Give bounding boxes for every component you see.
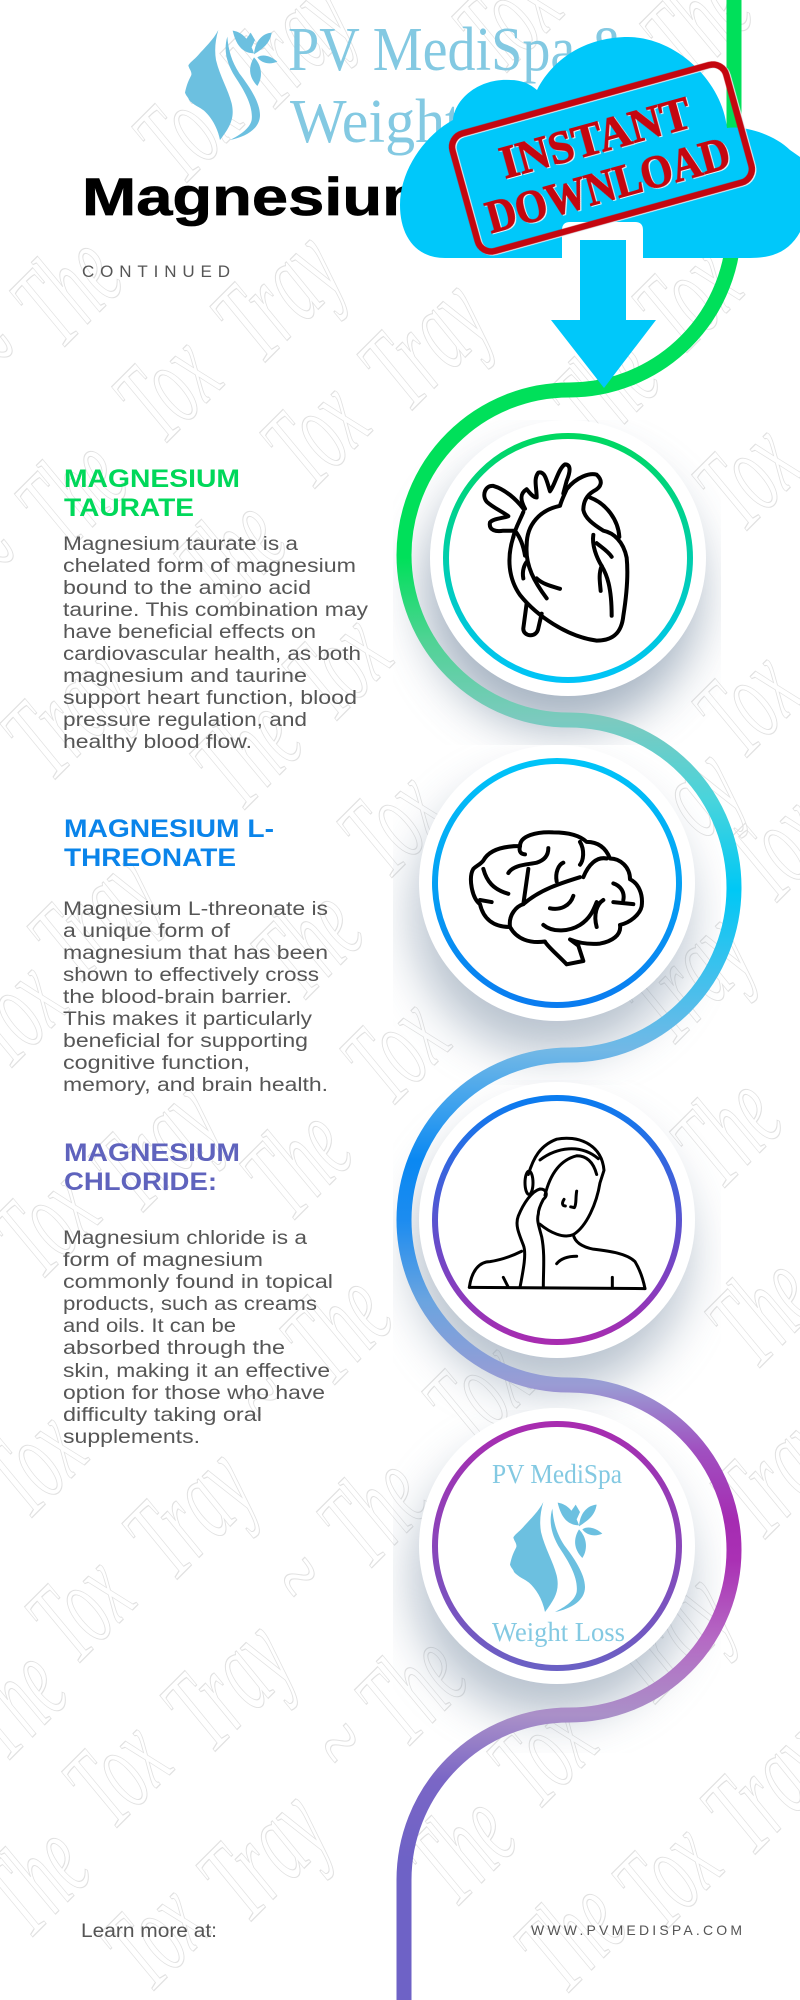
subtitle: CONTINUED — [82, 262, 230, 281]
body: magnesium chloride: skin, making it an effective — [63, 1361, 330, 1382]
watermark: The Tox Tray: Tox — [87, 307, 245, 465]
body: magnesium taurate: healthy blood flow. — [63, 732, 252, 753]
title: Magnesium — [82, 168, 440, 227]
logo text: PV MediSpa: PV MediSpa — [492, 1459, 622, 1489]
heading: magnesium taurate: TAURATE — [64, 494, 194, 522]
header logo: PV MediSpa & Weight Loss — [185, 16, 633, 156]
watermark: The Tox Tray: Tox — [235, 353, 393, 511]
stamp: instant download: INSTANT — [494, 87, 697, 189]
body: magnesium taurate: bound to the amino acid — [63, 578, 311, 599]
logo text: Weight Loss: Weight Loss — [492, 1617, 625, 1647]
watermark: The Tox Tray: Tox — [587, 1794, 745, 1952]
panel: magnesium taurate text — [63, 465, 369, 753]
icon: woman touching face — [469, 1138, 645, 1289]
footer: learn more: Learn more at: — [81, 1921, 217, 1942]
watermark: The Tox Tray: Tray — [63, 1052, 246, 1235]
circle: woman touching face — [419, 1082, 695, 1358]
watermark: The Tox Tray: ~ — [237, 1516, 359, 1638]
watermark: The Tox Tray: Tray — [97, 1419, 280, 1602]
watermark: The Tox Tray: Tray — [2, 822, 185, 1005]
circle: PV MediSpa Weight Loss logo — [419, 1408, 695, 1684]
icon: download cloud — [400, 37, 800, 258]
watermark: The Tox Tray: Tox — [312, 742, 470, 900]
circle drop shadows — [413, 454, 700, 1717]
watermark: The Tox Tray: Tox — [0, 1527, 158, 1685]
watermark: The Tox Tray: Tox — [37, 1692, 195, 1850]
body: magnesium l-threonate: shown to effectively cross — [63, 965, 319, 986]
panel: magnesium l-threonate text — [63, 815, 328, 1096]
header logo: PV MediSpa & Weight Loss: Weight Loss — [290, 88, 590, 156]
stamp: instant download — [449, 61, 755, 255]
watermark: The Tox Tray: The — [522, 308, 683, 469]
watermark: The Tox Tray: The — [292, 1429, 453, 1590]
body: magnesium taurate: magnesium and taurine — [63, 666, 307, 687]
icon: face logo — [510, 1502, 602, 1612]
body: magnesium taurate: have beneficial effects on — [63, 622, 316, 643]
watermark: The Tox Tray: Tray — [332, 250, 515, 433]
body: magnesium l-threonate: a unique form of — [63, 921, 231, 942]
heading: magnesium chloride: CHLORIDE: — [64, 1168, 217, 1196]
heading: magnesium taurate — [64, 465, 240, 522]
winding gradient path — [404, 0, 734, 2000]
body: magnesium taurate: taurine. This combination may — [63, 600, 369, 621]
body: magnesium l-threonate — [63, 899, 328, 1096]
watermark: The Tox Tray: Tray — [171, 1761, 354, 1944]
body: magnesium chloride: Magnesium chloride is a — [63, 1228, 308, 1249]
body: magnesium chloride: absorbed through the — [63, 1338, 285, 1359]
heading: magnesium chloride — [64, 1139, 240, 1196]
heading: magnesium chloride: MAGNESIUM — [64, 1139, 240, 1167]
watermark: The Tox Tray: Tray — [185, 202, 368, 385]
body: magnesium chloride: products, such as creams — [63, 1294, 317, 1315]
circle: heart — [430, 420, 706, 696]
body: magnesium taurate: cardiovascular health, as both — [63, 644, 361, 665]
body: magnesium chloride — [63, 1228, 333, 1448]
watermark: The Tox Tray: Tray — [135, 1591, 318, 1774]
body: magnesium l-threonate: This makes it particularly — [63, 1009, 313, 1030]
watermark: The Tox Tray: The — [165, 671, 326, 832]
heading: magnesium taurate: MAGNESIUM — [64, 465, 240, 493]
body: magnesium l-threonate: magnesium that has been — [63, 943, 328, 964]
watermark: The Tox Tray: The — [330, 1607, 491, 1768]
body: magnesium chloride: commonly found in topical — [63, 1272, 333, 1293]
body: magnesium taurate: pressure regulation, and — [63, 710, 307, 731]
body: magnesium l-threonate: cognitive function, — [63, 1053, 250, 1074]
panel: magnesium chloride text — [63, 1139, 333, 1448]
heading: magnesium l-threonate: MAGNESIUM L- — [64, 815, 274, 843]
watermark: The Tox Tray: The — [215, 1081, 376, 1242]
body: magnesium chloride: and oils. It can be — [63, 1316, 236, 1337]
watermark: The Tox Tray: Tox — [397, 1312, 555, 1470]
body: magnesium taurate: chelated form of magnesium — [63, 556, 356, 577]
body: magnesium taurate: support heart function, blood — [63, 688, 357, 709]
watermark: The Tox Tray: The — [379, 1767, 540, 1928]
heading: magnesium l-threonate: THREONATE — [64, 844, 236, 872]
body: magnesium chloride: form of magnesium — [63, 1250, 263, 1271]
watermark: The Tox Tray: Tox — [462, 1672, 620, 1830]
header logo: PV MediSpa & Weight Loss: PV MediSpa & — [288, 16, 633, 84]
body: magnesium chloride: option for those who have — [63, 1383, 325, 1404]
watermark: The Tox Tray: Tox — [315, 969, 473, 1127]
watermark: The Tox Tray: The — [226, 861, 387, 1022]
body: magnesium l-threonate: memory, and brain health. — [63, 1075, 328, 1096]
icon: heart — [484, 464, 627, 641]
heading: magnesium l-threonate — [64, 815, 274, 872]
stamp: instant download: DOWNLOAD — [480, 127, 736, 244]
arrow: download — [551, 240, 656, 388]
footer: website: WWW.PVMEDISPA.COM — [531, 1922, 742, 1938]
body: magnesium taurate — [63, 534, 369, 753]
watermark: The Tox Tray: Tox — [257, 585, 415, 743]
body: magnesium chloride: difficulty taking oral — [63, 1405, 262, 1426]
icon: brain — [471, 832, 642, 964]
body: magnesium taurate: Magnesium taurate is a — [63, 534, 298, 555]
body: magnesium chloride: supplements. — [63, 1427, 200, 1448]
watermark: The Tox Tray: The — [149, 471, 310, 632]
watermark: The Tox Tray: ~ — [278, 1682, 400, 1804]
watermark: The Tox Tray: The — [255, 1246, 416, 1407]
body: magnesium l-threonate: Magnesium L-threonate is — [63, 899, 328, 920]
circle: brain — [419, 745, 695, 1021]
watermark: The Tox Tray: ~ — [201, 1336, 323, 1458]
body: magnesium l-threonate: the blood-brain barrier. — [63, 987, 292, 1008]
body: magnesium l-threonate: beneficial for supporting — [63, 1031, 308, 1052]
